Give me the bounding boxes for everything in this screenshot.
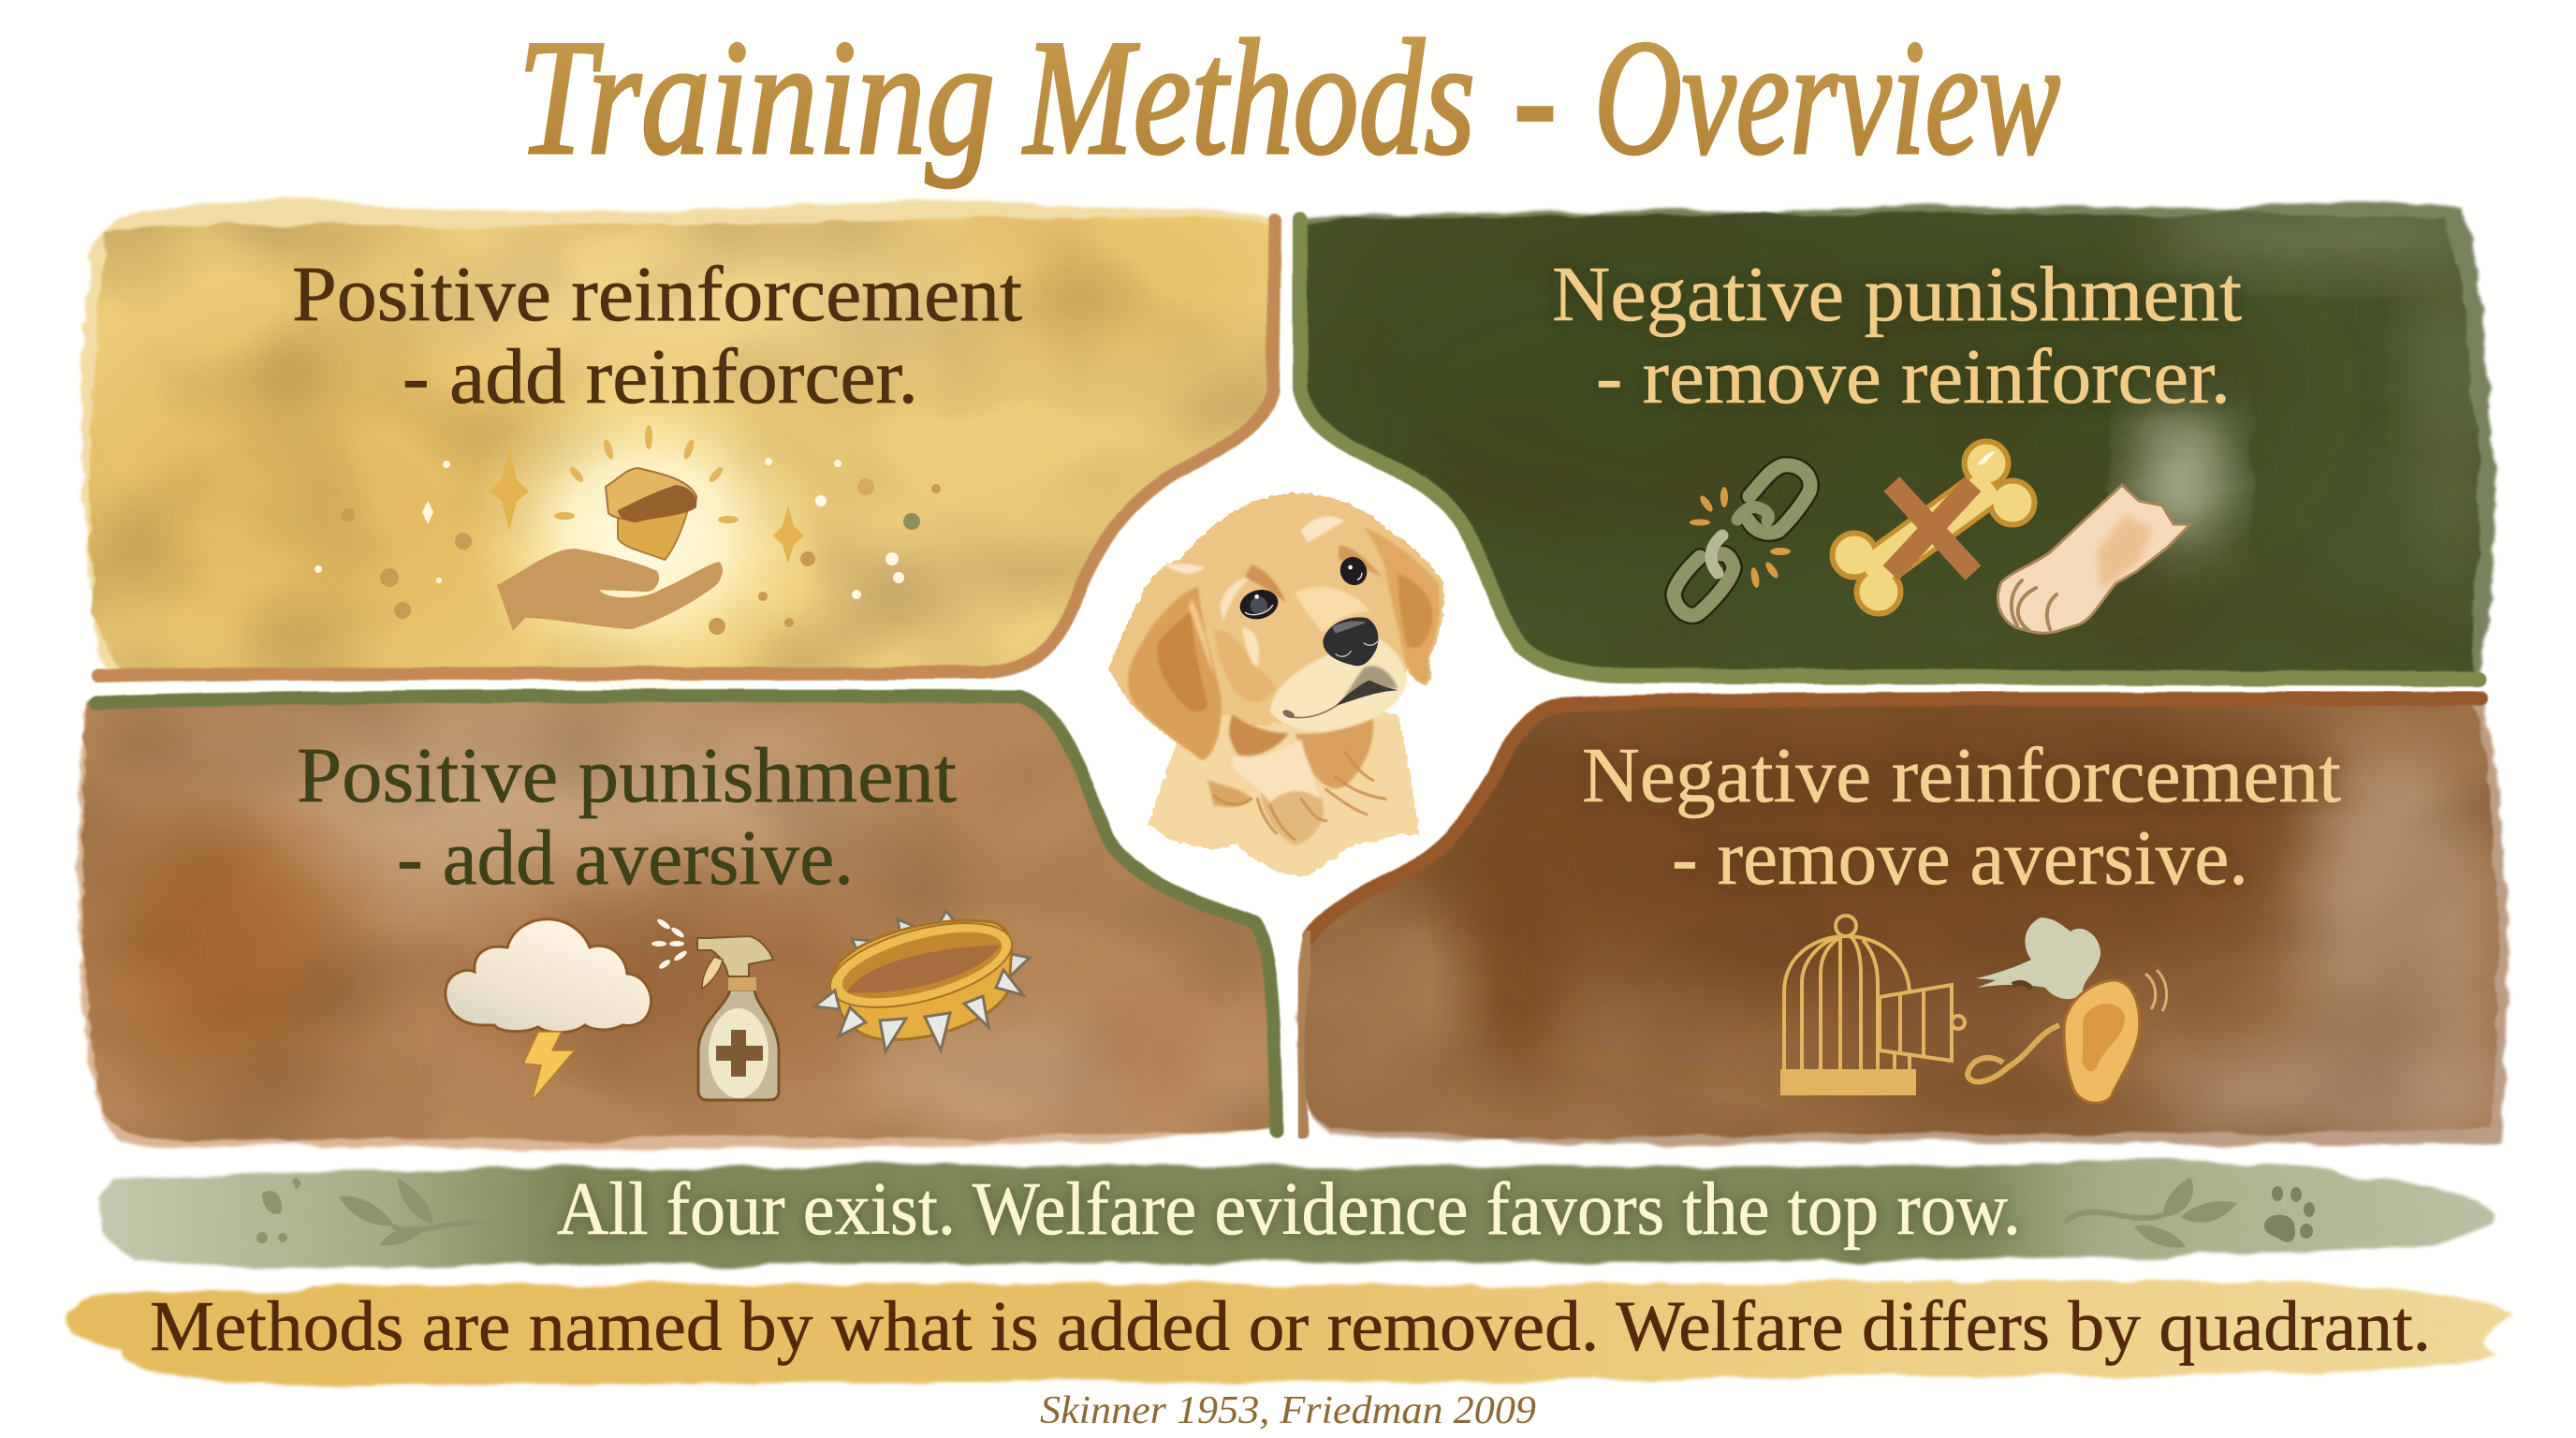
heading: positive reinforcement: Positive reinforcement bbox=[292, 251, 1022, 338]
heading: positive punishment bbox=[297, 732, 957, 902]
icon: treat in open hand bbox=[497, 425, 739, 631]
divider stroke: olive panel edge bbox=[95, 696, 1277, 1132]
citation: Skinner 1953, Friedman 2009 bbox=[1040, 1389, 1536, 1432]
divider stroke: brown panel edge bbox=[1310, 698, 2481, 936]
panel: positive reinforcement bbox=[66, 187, 1292, 697]
eyes bbox=[1237, 552, 1371, 624]
title: - bbox=[1514, 7, 1557, 189]
icon: spray bottle bbox=[651, 917, 779, 1100]
sparkles and specks bbox=[315, 448, 941, 635]
icon: ear with lead bbox=[1968, 970, 2167, 1103]
icon: air puff bbox=[1976, 917, 2100, 999]
face shading bbox=[1214, 517, 1383, 702]
heading: positive punishment: - add aversive. bbox=[397, 814, 854, 902]
icon: paw print bbox=[2264, 1186, 2315, 1242]
icon: right leaf sprig bbox=[2064, 1178, 2237, 1248]
heading: positive punishment: Positive punishment bbox=[297, 732, 957, 819]
chest shading bbox=[1208, 714, 1373, 845]
muzzle bbox=[1270, 635, 1407, 732]
icon: left leaf sprig bbox=[256, 1178, 509, 1245]
banner text: welfare evidence: All four exist. Welfare evidence favors the top row. bbox=[557, 1168, 2021, 1251]
gold banner bbox=[66, 1281, 2511, 1384]
icon: broken chain bbox=[1674, 465, 1810, 615]
heading: negative reinforcement: - remove aversive. bbox=[1672, 814, 2248, 902]
title: Methods bbox=[1022, 7, 1475, 189]
panel: positive punishment bbox=[66, 683, 1292, 1152]
heading: positive reinforcement bbox=[292, 251, 1022, 420]
olive banner bbox=[98, 1162, 2495, 1267]
icon: dog paw leaving bbox=[1998, 485, 2190, 633]
title: Overview bbox=[1594, 7, 2060, 189]
left ear bbox=[1128, 564, 1222, 760]
heading: negative punishment: Negative punishment bbox=[1552, 251, 2242, 338]
icon: storm cloud bbox=[446, 919, 651, 1101]
icon: crossed-out bone bbox=[1830, 439, 2037, 616]
title: Training bbox=[518, 7, 995, 189]
heading: negative punishment bbox=[1552, 251, 2242, 420]
glow behind treat bbox=[463, 370, 828, 697]
head and ears silhouette bbox=[1109, 493, 1444, 760]
nose bbox=[1323, 617, 1378, 666]
heading: positive reinforcement: - add reinforcer. bbox=[402, 333, 918, 420]
dog illustration bbox=[1109, 493, 1444, 877]
divider stroke: yellow panel edge bbox=[97, 221, 1275, 677]
heading: negative punishment: - remove reinforcer. bbox=[1596, 333, 2231, 420]
right ear bbox=[1364, 527, 1440, 683]
divider stroke: green panel edge bbox=[1300, 219, 2479, 680]
chest fur bbox=[1149, 686, 1420, 877]
panel: negative reinforcement bbox=[1294, 702, 2511, 1150]
title bbox=[518, 7, 2060, 189]
icon: open cage bbox=[1780, 916, 1965, 1095]
heading: negative reinforcement bbox=[1582, 732, 2341, 902]
heading: negative reinforcement: Negative reinforcement bbox=[1582, 732, 2341, 819]
banner text: methods named: Methods are named by what is added or removed. Welfare differs by quadrant. bbox=[150, 1287, 2431, 1366]
icon: chain break sparks bbox=[1690, 487, 1791, 589]
icon: spiked collar bbox=[814, 906, 1030, 1051]
panel: negative punishment bbox=[1292, 187, 2537, 683]
chest fur streaks bbox=[1214, 752, 1385, 840]
